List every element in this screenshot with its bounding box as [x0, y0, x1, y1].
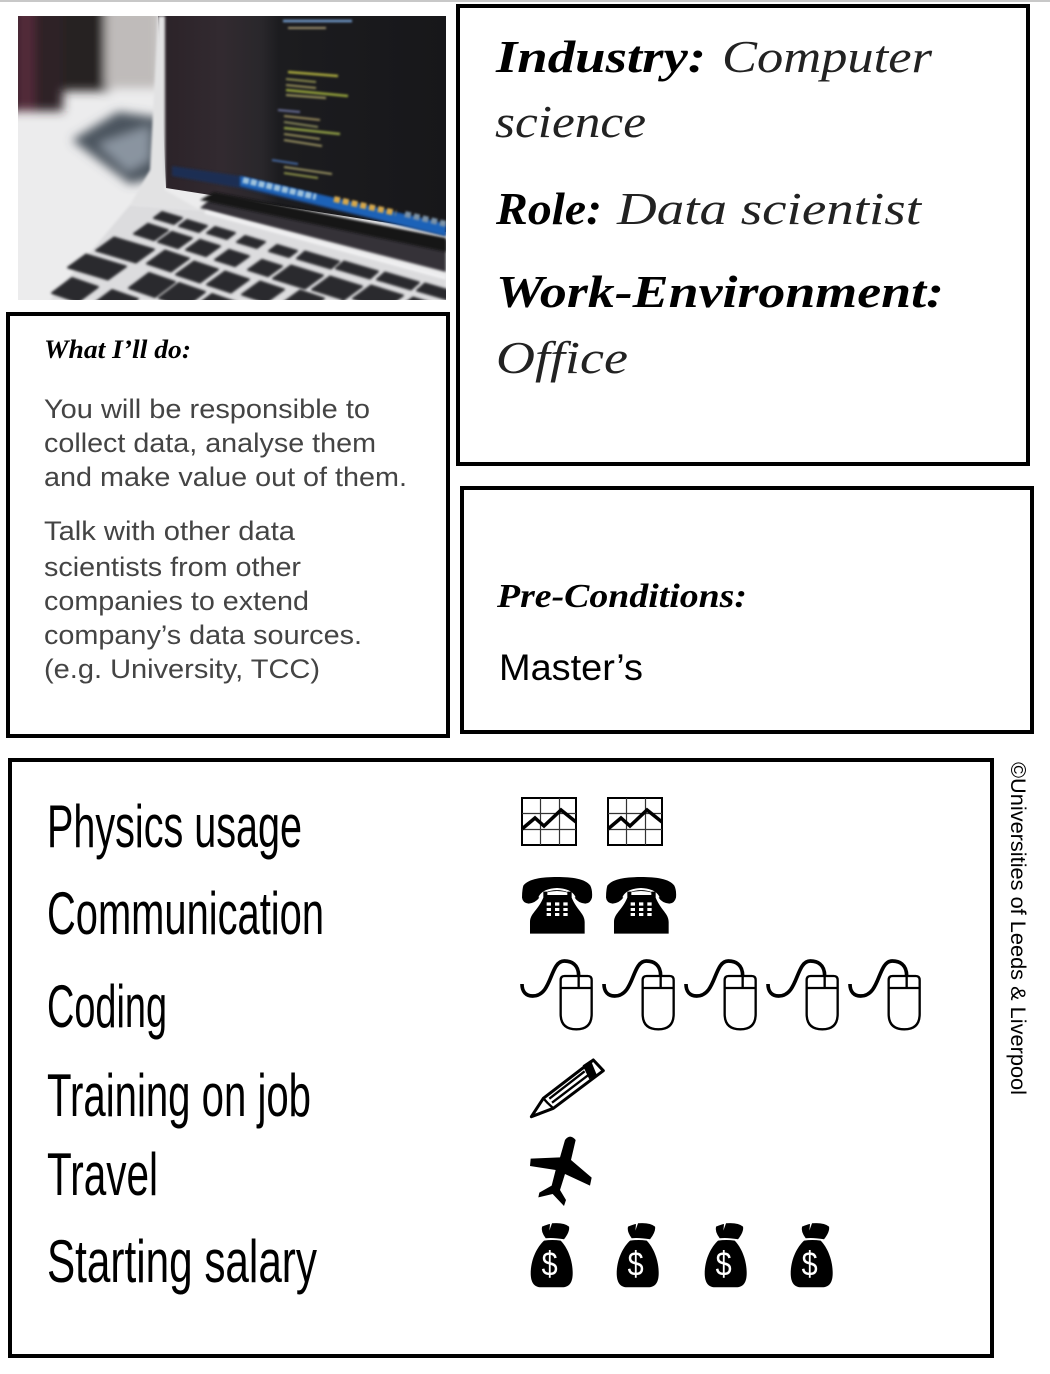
- panel: what I'll do: [8, 314, 448, 736]
- pre-condition value: Master’s: [499, 647, 643, 688]
- text block: responsibilities: companies to extend: [44, 586, 309, 616]
- icons: starting salary rating: $: [716, 1246, 732, 1284]
- icons: starting salary rating: $: [802, 1246, 818, 1284]
- panel: pre-conditions: [462, 488, 1032, 732]
- heading: pre-conditions: Pre-Conditions:: [496, 578, 747, 615]
- text block: responsibilities: collect data, analyse them: [44, 428, 376, 458]
- keys: [50, 209, 446, 300]
- icon: pencil: [531, 1060, 603, 1117]
- dock band: [172, 166, 446, 236]
- icons: starting salary rating: $: [542, 1246, 558, 1284]
- text block: responsibilities: and make value out of them.: [44, 462, 407, 492]
- icons: starting salary rating: $: [628, 1246, 644, 1284]
- label: coding: Coding: [47, 973, 167, 1040]
- Role value: Data scientist: [616, 183, 922, 234]
- text block: responsibilities: [44, 394, 407, 684]
- dock icons and blurred code: [243, 21, 446, 224]
- label: travel: Travel: [47, 1141, 158, 1208]
- Work-Environment label: Work-Environment:: [496, 266, 944, 317]
- icons: physics usage rating: [522, 798, 662, 845]
- text block: responsibilities: scientists from other: [44, 552, 301, 582]
- copyright note: ©Universities of Leeds & Liverpool: [1006, 762, 1029, 1095]
- label: physics usage: Physics usage: [47, 793, 302, 860]
- science value: science: [495, 96, 646, 147]
- text block: responsibilities: (e.g. University, TCC): [44, 654, 320, 684]
- icons: starting salary rating: [531, 1223, 833, 1287]
- panel: industry, role, work environment: [458, 6, 1028, 464]
- Work-Environment value: Office: [496, 332, 628, 383]
- Computer value: Computer: [722, 31, 933, 82]
- text block: responsibilities: company’s data sources.: [44, 620, 362, 650]
- photo: laptop showing code: [18, 16, 446, 300]
- text block: responsibilities: You will be responsible to: [44, 394, 370, 424]
- Industry line: Industry:: [495, 31, 706, 82]
- label: starting salary: Starting salary: [47, 1228, 317, 1295]
- icons: coding rating: [522, 961, 920, 1029]
- keyboard deck: [50, 205, 446, 300]
- icon: airplane: [530, 1137, 592, 1206]
- heading: what I'll do: What I’ll do:: [44, 335, 191, 364]
- icons: communication rating: [522, 877, 676, 934]
- label: communication: Communication: [47, 880, 324, 947]
- text block: responsibilities: Talk with other data: [44, 516, 296, 546]
- Role label: Role:: [495, 183, 602, 234]
- label: training on job: Training on job: [47, 1062, 311, 1129]
- panel: skills ratings: [10, 760, 992, 1356]
